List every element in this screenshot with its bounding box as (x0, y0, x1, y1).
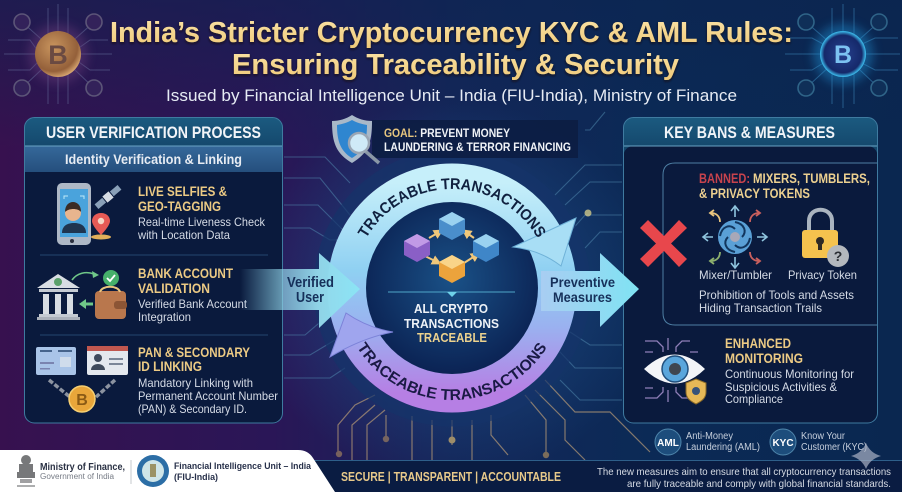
text: FIU India: Financial Intelligence Unit – India (174, 461, 312, 471)
icon: PAN card, ID card and chained coin (36, 346, 128, 412)
icon: bank and wallet (37, 270, 127, 320)
text: bank account validation: Verified Bank Account (138, 297, 248, 311)
text: bank account validation: VALIDATION (138, 281, 210, 296)
text: PAN and secondary ID linking: PAN & SECONDARY (138, 345, 250, 360)
logo strip (0, 450, 335, 492)
text: banned (699, 171, 870, 201)
text: bank account validation (138, 266, 248, 324)
labels: mixer and token: Mixer/Tumbler (699, 268, 772, 282)
icon: bitcoin coin with circuits, right: B (834, 41, 852, 69)
icon: FIU seal (137, 455, 169, 487)
title (110, 17, 793, 81)
text: live selfies: Real-time Liveness Check (138, 215, 266, 229)
arrow: preventive measures: Preventive (550, 275, 615, 290)
text: prohibition (699, 288, 854, 315)
icon: PAN card, ID card and chained coin: B (76, 392, 88, 409)
text: PAN and secondary ID linking: Mandatory Linking with (138, 376, 253, 390)
legend: AML: AML (657, 438, 679, 449)
icon: shield with magnifier (332, 115, 379, 163)
text: all crypto transactions traceable: ALL CRYPTO (414, 301, 488, 316)
label: top arc: TRACEABLE TRANSACTIONS (357, 178, 546, 237)
legend: KYC: Customer (KYC) (801, 442, 867, 453)
text: PAN and secondary ID linking: ID LINKING (138, 359, 202, 374)
text: enhanced monitoring (725, 336, 854, 406)
text: enhanced monitoring: Continuous Monitoring for (725, 367, 854, 381)
heading: key bans: KEY BANS & MEASURES (664, 124, 835, 142)
text: live selfies: GEO-TAGGING (138, 199, 221, 214)
text: PAN and secondary ID linking: (PAN) & Secondary ID. (138, 402, 247, 416)
label: bottom arc: TRACEABLE TRANSACTIONS (358, 341, 546, 400)
text: banned: & PRIVACY TOKENS (699, 186, 810, 201)
icon: bitcoin coin with circuits, right (785, 4, 900, 108)
arrow: verified user (240, 253, 360, 328)
legend: KYC: Know Your (801, 431, 846, 442)
icon: padlock privacy token (802, 210, 849, 267)
icon: bitcoin coin with circuits, left: B (48, 40, 68, 70)
text: all crypto transactions traceable: TRANSACTIONS (404, 316, 499, 331)
text: goal: GOAL: PREVENT MONEY (384, 128, 510, 140)
text: ministry of finance (40, 462, 125, 481)
icon: padlock privacy token: ? (834, 248, 842, 264)
icon: phone selfie with geotag (57, 183, 122, 245)
text: prohibition: Hiding Transaction Trails (699, 301, 822, 315)
legend: AML (655, 429, 760, 455)
text: PAN and secondary ID linking: Permanent Account Number (138, 389, 278, 403)
icon: bitcoin coin with circuits, left (4, 4, 112, 104)
labels: mixer and token (699, 268, 857, 282)
text: FIU India (174, 461, 312, 482)
text: enhanced monitoring: Suspicious Activities & (725, 380, 837, 394)
text: goal (384, 128, 571, 154)
text: banned: BANNED: (699, 171, 750, 186)
cycle diagram: traceable transactions (315, 164, 581, 426)
icon: monitoring eye with badge (644, 338, 706, 404)
panel: key bans and measures (624, 118, 878, 423)
arrow: preventive measures: Measures (553, 290, 612, 305)
text: goal: LAUNDERING & TERROR FINANCING (384, 142, 571, 154)
panel: user verification process (24, 118, 282, 423)
arrowhead: bottom arc (330, 313, 393, 357)
text: live selfies: LIVE SELFIES & (138, 184, 227, 199)
text: live selfies: with Location Data (137, 228, 230, 242)
title: India’s Stricter Cryptocurrency KYC & AML Rules: (110, 17, 793, 49)
footer bar (0, 460, 902, 492)
text: prohibition: Prohibition of Tools and Assets (699, 288, 854, 302)
subheading: identity verification: Identity Verification & Linking (65, 152, 242, 167)
tagline: SECURE | TRANSPARENT | ACCOUNTABLE (341, 470, 561, 484)
arrow: verified user: User (296, 290, 324, 306)
heading: user verification process: USER VERIFICATION PROCESS (46, 124, 261, 142)
legend: KYC (770, 429, 867, 455)
text: bank account validation: Integration (138, 310, 191, 324)
text: bank account validation: BANK ACCOUNT (138, 266, 234, 281)
text: all crypto transactions traceable (404, 301, 499, 345)
circuit board traces (284, 112, 622, 400)
legend: AML: Anti-Money (686, 431, 733, 442)
subtitle: Issued by Financial Intelligence Unit – India (FIU-India), Ministry of Finance (166, 86, 737, 105)
icon: sparkle watermark (851, 443, 881, 469)
lower circuit traces (336, 210, 650, 460)
arrow: preventive measures (541, 253, 639, 327)
text: enhanced monitoring: ENHANCED (725, 336, 791, 351)
text: enhanced monitoring: Compliance (725, 392, 783, 406)
text: PAN and secondary ID linking (138, 345, 278, 416)
icon: mixer tumbler (703, 206, 767, 268)
text: banned: MIXERS, TUMBLERS, (753, 171, 870, 186)
legend: KYC: KYC (772, 438, 794, 449)
text: ministry of finance: Government of India (40, 472, 115, 481)
legend: AML: Laundering (AML) (686, 442, 760, 453)
text: live selfies (137, 184, 266, 242)
text: enhanced monitoring: MONITORING (725, 351, 803, 366)
text: FIU India: (FIU-India) (174, 472, 218, 482)
text: all crypto transactions traceable: TRACEABLE (417, 330, 487, 345)
arrow: verified user: Verified (287, 275, 334, 291)
text: ministry of finance: Ministry of Finance, (40, 462, 125, 473)
arrowhead: top arc (513, 218, 576, 266)
title: Ensuring Traceability & Security (232, 49, 679, 81)
icon: national emblem (17, 455, 35, 487)
goal callout (332, 115, 578, 163)
labels: mixer and token: Privacy Token (788, 268, 857, 282)
footer note (597, 466, 891, 490)
icon: blockchain cubes (404, 212, 499, 283)
icon: red cross (640, 220, 687, 267)
